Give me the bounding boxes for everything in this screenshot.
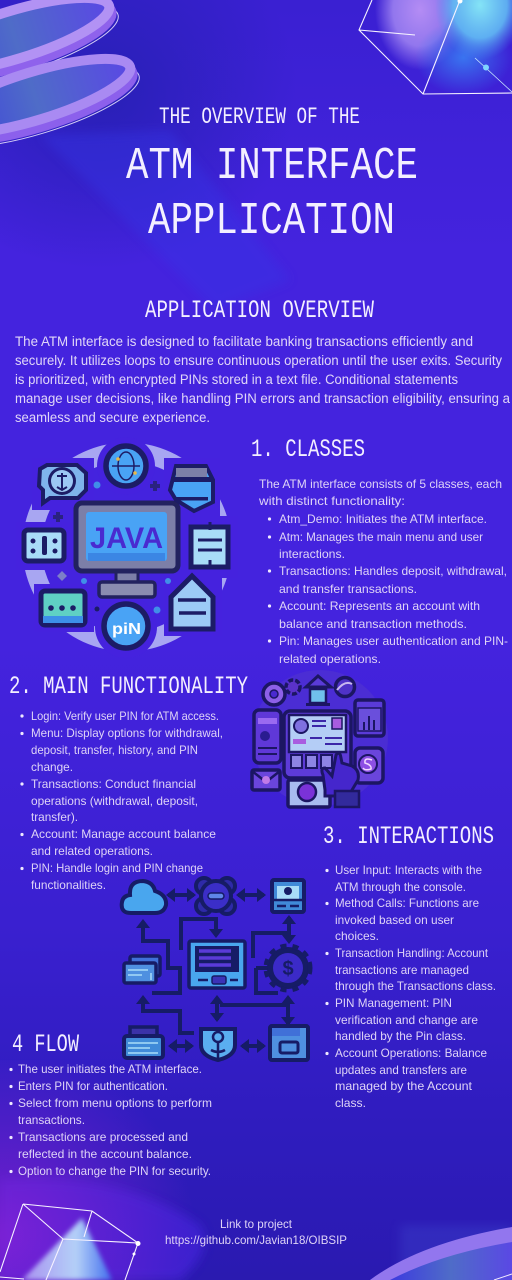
text block: interactions list: Transaction Handling: Account [335, 946, 489, 960]
icon: shield pin [201, 1029, 235, 1060]
text block: main functionality list: operations (withdrawal, deposit, [31, 794, 198, 808]
text block: main functionality list: Account: Manage account balance [31, 827, 216, 841]
text block: classes list: with distinct functionality: [258, 494, 405, 508]
text block: interactions list: verification and change are [335, 1013, 478, 1027]
text block: classes list: Pin: Manages user authentication and PIN- [279, 634, 508, 648]
text block: main functionality list: PIN: Handle login and PIN change [31, 861, 203, 875]
icon: secure printer [272, 880, 304, 912]
icon: banknote [39, 465, 86, 503]
text block: project link: Link to project [220, 1217, 293, 1231]
text block: main functionality list: deposit, transfer, history, and PIN [31, 743, 198, 757]
decoration: bottom-right ring [370, 1225, 512, 1280]
icon: pin badge [104, 604, 148, 648]
icon: cloud [122, 881, 166, 913]
text block: flow list: Enters PIN for authentication. [18, 1079, 168, 1093]
text block: classes list: and transfer transactions. [279, 582, 417, 596]
icon: sparkles [53, 481, 171, 614]
heading: classes: 1. CLASSES [251, 435, 365, 464]
icon: envelope [252, 770, 280, 790]
icon: receipt printer [124, 1027, 163, 1058]
icon: house note [171, 576, 213, 629]
icon: control panel [24, 530, 64, 561]
icon: flow diagram [122, 878, 310, 1060]
icon: globe badge [336, 678, 354, 696]
text block: overview paragraph: manage user decisions, like handling PIN errors and transaction eligibility, ensuring a [15, 391, 510, 406]
text block: classes list: balance and transaction methods. [279, 617, 467, 631]
text block: main functionality list [20, 709, 223, 892]
text block: interactions list: PIN Management: PIN [335, 996, 452, 1010]
icon: chat box [41, 591, 85, 625]
text block: interactions list: class. [335, 1096, 366, 1110]
icon: java monitor cluster [16, 437, 238, 658]
text block: classes list: interactions. [279, 547, 345, 561]
text block: overview paragraph [15, 334, 510, 425]
text block: interactions list: Account Operations: Balance [335, 1046, 487, 1060]
icon: jar [170, 466, 213, 511]
icon: puzzle gear [286, 680, 300, 694]
text block: classes list: Atm_Demo: Initiates the ATM interface. [279, 512, 487, 526]
text block: interactions list: User Input: Interacts with the [335, 863, 482, 877]
text block: project link [165, 1217, 347, 1247]
text block: flow list [9, 1062, 212, 1178]
icon: monitor: JAVA [90, 522, 163, 555]
icon: chart panel [355, 700, 384, 736]
icon: document [191, 522, 228, 568]
text block: flow list: Option to change the PIN for security. [18, 1164, 211, 1178]
text block: main functionality list: change. [31, 760, 73, 774]
text block: main functionality list: and related operations. [31, 844, 153, 858]
icon: coin card [355, 748, 383, 783]
decoration: top-right prism [359, 0, 512, 95]
icon: pin badge: piN [112, 621, 141, 638]
title: THE OVERVIEW OF THE [159, 104, 360, 130]
title [126, 104, 418, 247]
text block: flow list: Transactions are processed and [18, 1130, 188, 1144]
text block: interactions list: Method Calls: Functions are [335, 896, 479, 910]
title: ATM INTERFACE [126, 141, 418, 192]
text block: main functionality list: Login: Verify user PIN for ATM access. [31, 709, 219, 723]
text block: overview paragraph: seamless and secure experience. [15, 410, 210, 425]
text block: classes list: Atm: Manages the main menu and user [279, 530, 483, 544]
text block: main functionality list: transfer). [31, 810, 78, 824]
icon: browser window [270, 1026, 308, 1060]
text block: interactions list [325, 863, 496, 1110]
text block: interactions list: handled by the Pin class. [335, 1029, 466, 1043]
text block: interactions list: ATM through the console. [335, 880, 466, 894]
icon: phone [254, 710, 281, 763]
icon: media card [288, 780, 330, 807]
icon: atm touchscreen cluster [252, 670, 388, 807]
icon: pointing hand [322, 753, 359, 807]
text block: main functionality list: Menu: Display options for withdrawal, [31, 726, 223, 740]
icon: central atm screen [189, 941, 245, 988]
icon: pie chart [263, 683, 285, 705]
decoration: top-left rings [0, 0, 147, 163]
text block: classes list: The ATM interface consists of 5 classes, each [259, 477, 502, 491]
text block: classes list [258, 477, 508, 666]
text block: classes list: related operations. [279, 652, 381, 666]
heading: flow: 4 FLOW [12, 1030, 79, 1059]
text block: flow list: The user initiates the ATM interface. [18, 1062, 202, 1076]
text block: overview paragraph: The ATM interface is designed to facilitate banking transactions efficiently and [15, 334, 473, 349]
text block: project link: https://github.com/Javian18/OIBSIP [165, 1233, 347, 1247]
decoration: bottom-left cube [0, 1204, 140, 1280]
arrows: connectors [136, 888, 296, 1053]
text block: interactions list: managed by the Account [335, 1079, 473, 1093]
icon: terminal [284, 711, 351, 778]
text block: interactions list: choices. [335, 929, 379, 943]
icon: bank building [306, 676, 331, 706]
text block: flow list: reflected in the account balance. [18, 1147, 192, 1161]
icon: globe [106, 446, 146, 486]
text block: flow list: Select from menu options to perform [18, 1096, 212, 1110]
icon: card stack [124, 956, 160, 983]
text block: interactions list: updates and transfers are [335, 1063, 467, 1077]
icon: brain logo [196, 878, 235, 914]
title: APPLICATION [148, 196, 395, 247]
icon: dollar gear: $ [282, 958, 294, 980]
text block: main functionality list: functionalities. [31, 878, 106, 892]
heading: main functionality: 2. MAIN FUNCTIONALITY [9, 672, 248, 701]
text block: main functionality list: Transactions: Conduct financial [31, 777, 196, 791]
text block: overview paragraph: is prioritized, with encrypted PINs stored in a text file. Conditional statements [15, 372, 458, 387]
text block: interactions list: invoked based on user [335, 913, 454, 927]
text block: interactions list: transactions are managed [335, 963, 469, 977]
text block: classes list: Account: Represents an account with [279, 599, 480, 613]
icon: dollar gear [266, 946, 310, 990]
text block: classes list: Transactions: Handles deposit, withdrawal, [279, 564, 507, 578]
text block: interactions list: through the Transactions class. [335, 979, 496, 993]
icon: monitor [76, 503, 178, 597]
text block: flow list: transactions. [18, 1113, 85, 1127]
text block: overview paragraph: securely. It utilizes loops to ensure continuous operation until the user exits. Security [15, 353, 502, 368]
heading: application overview: APPLICATION OVERVIEW [145, 296, 374, 325]
